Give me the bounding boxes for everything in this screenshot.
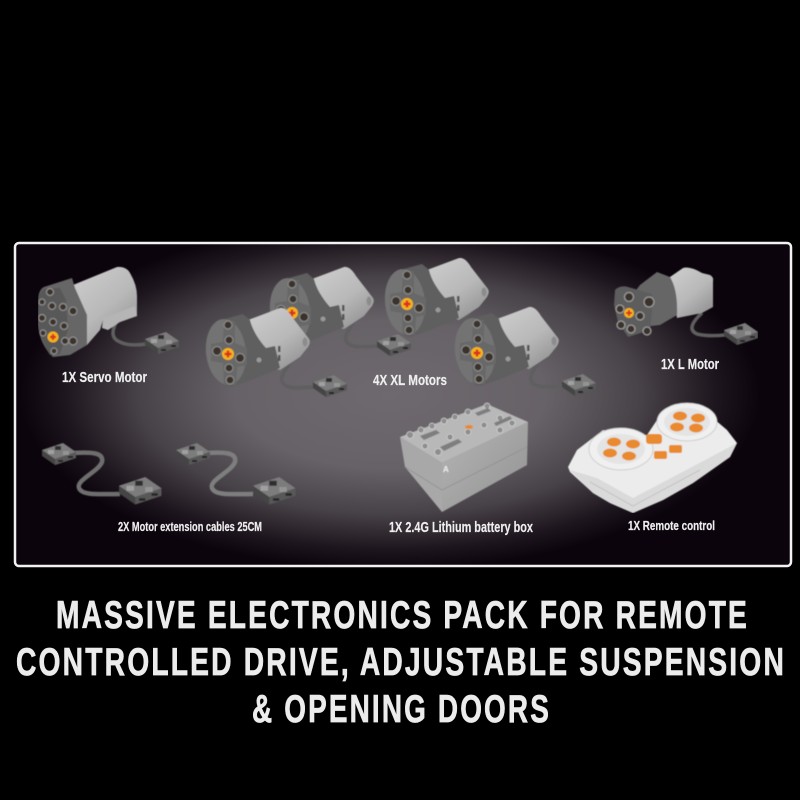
- icon: remote control: [568, 403, 737, 513]
- panel: electronics parts: [15, 243, 791, 566]
- icon: battery box: A: [443, 465, 449, 474]
- icon: battery box: [400, 403, 528, 512]
- label: servo motor: 1X Servo Motor: [62, 369, 147, 386]
- label: extension cables: 2X Motor extension cables 25CM: [118, 519, 262, 534]
- headline: & OPENING DOORS: [252, 688, 551, 731]
- icon: servo motor: [38, 267, 179, 357]
- panel background: [15, 243, 791, 566]
- icon: XL motor front left: [203, 308, 347, 397]
- label: battery box: 1X 2.4G Lithium battery box: [389, 519, 533, 536]
- parts illustrations: [38, 258, 758, 513]
- headline: [16, 594, 786, 731]
- label: XL motors: 4X XL Motors: [373, 372, 447, 389]
- label: remote control: 1X Remote control: [628, 518, 715, 533]
- label: L motor: 1X L Motor: [661, 356, 719, 373]
- icon: XL motor back left: [267, 267, 411, 356]
- icon: XL motor back right: [382, 258, 526, 347]
- icon: L motor: [614, 268, 758, 345]
- icon: XL motor front right: [452, 307, 596, 396]
- icon: extension cable 1: [42, 443, 162, 504]
- icon: extension cable 2: [176, 443, 296, 504]
